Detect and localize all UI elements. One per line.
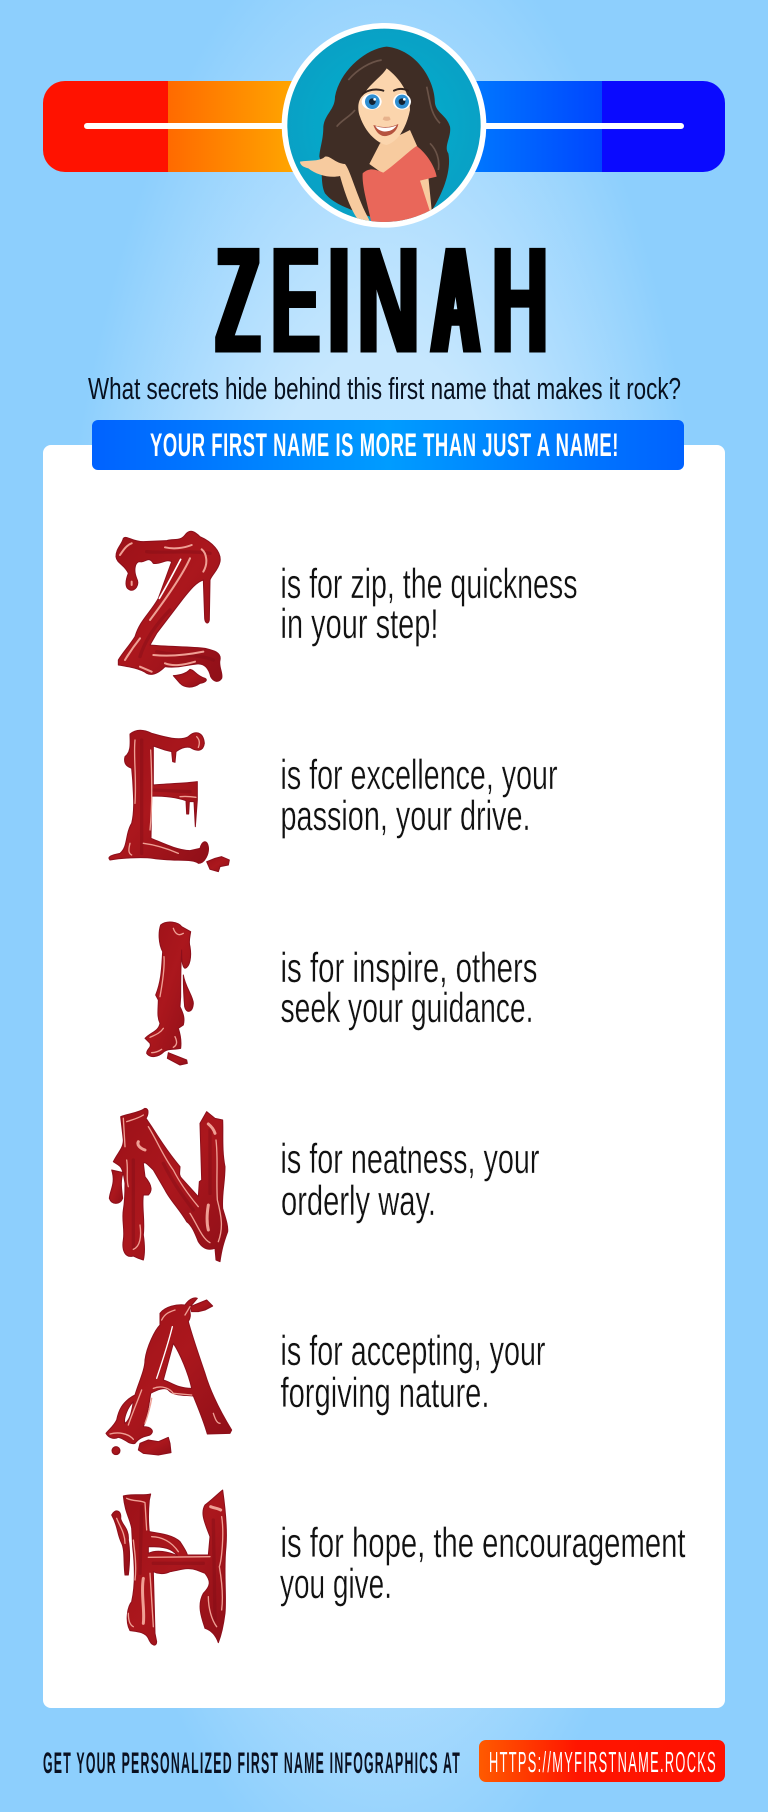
text: N meaning: orderly way. [281, 1177, 436, 1224]
icon: blood letter Z [116, 531, 222, 687]
text: N meaning: is for neatness, your [280, 1135, 540, 1182]
footer url button [479, 1740, 725, 1782]
title: I [328, 216, 351, 386]
row: letter Z [116, 531, 577, 687]
icon: blood letter I [145, 922, 193, 1065]
icon: blood letter H [112, 1490, 226, 1645]
text: A meaning: is for accepting, your [280, 1327, 546, 1374]
text: H meaning: you give. [280, 1560, 392, 1607]
title: E [271, 216, 320, 386]
text: I meaning: is for inspire, others [280, 944, 538, 991]
text: Z meaning: is for zip, the quickness [280, 560, 578, 607]
row: letter N [109, 1108, 540, 1262]
title [218, 216, 548, 386]
row: letter H [112, 1490, 686, 1645]
panel: letter meanings [43, 445, 725, 1708]
icon: blood letter A [106, 1298, 232, 1455]
row: letter I [145, 922, 538, 1065]
text: N meaning [280, 1135, 540, 1224]
text: E meaning [280, 751, 558, 839]
text: E meaning: is for excellence, your [280, 751, 558, 798]
text: I meaning [280, 944, 538, 1031]
header colour bar [43, 81, 725, 172]
text: A meaning [280, 1327, 546, 1416]
title: A [432, 216, 478, 386]
title: N [357, 216, 420, 386]
text: H meaning [280, 1519, 686, 1607]
text: I meaning: seek your guidance. [280, 984, 534, 1031]
row: letter E [109, 730, 558, 872]
text: E meaning: passion, your drive. [280, 792, 530, 839]
text: Z meaning: in your step! [280, 600, 438, 647]
icon: blood letter E [109, 730, 229, 872]
title: Z [218, 216, 258, 386]
text: Z meaning [280, 560, 578, 647]
title: H [492, 216, 548, 386]
icon: blood letter N [109, 1108, 228, 1262]
portrait: cartoon woman in circle [282, 23, 486, 228]
row: letter A [106, 1298, 546, 1455]
text: A meaning: forgiving nature. [280, 1369, 490, 1416]
banner [92, 420, 684, 470]
